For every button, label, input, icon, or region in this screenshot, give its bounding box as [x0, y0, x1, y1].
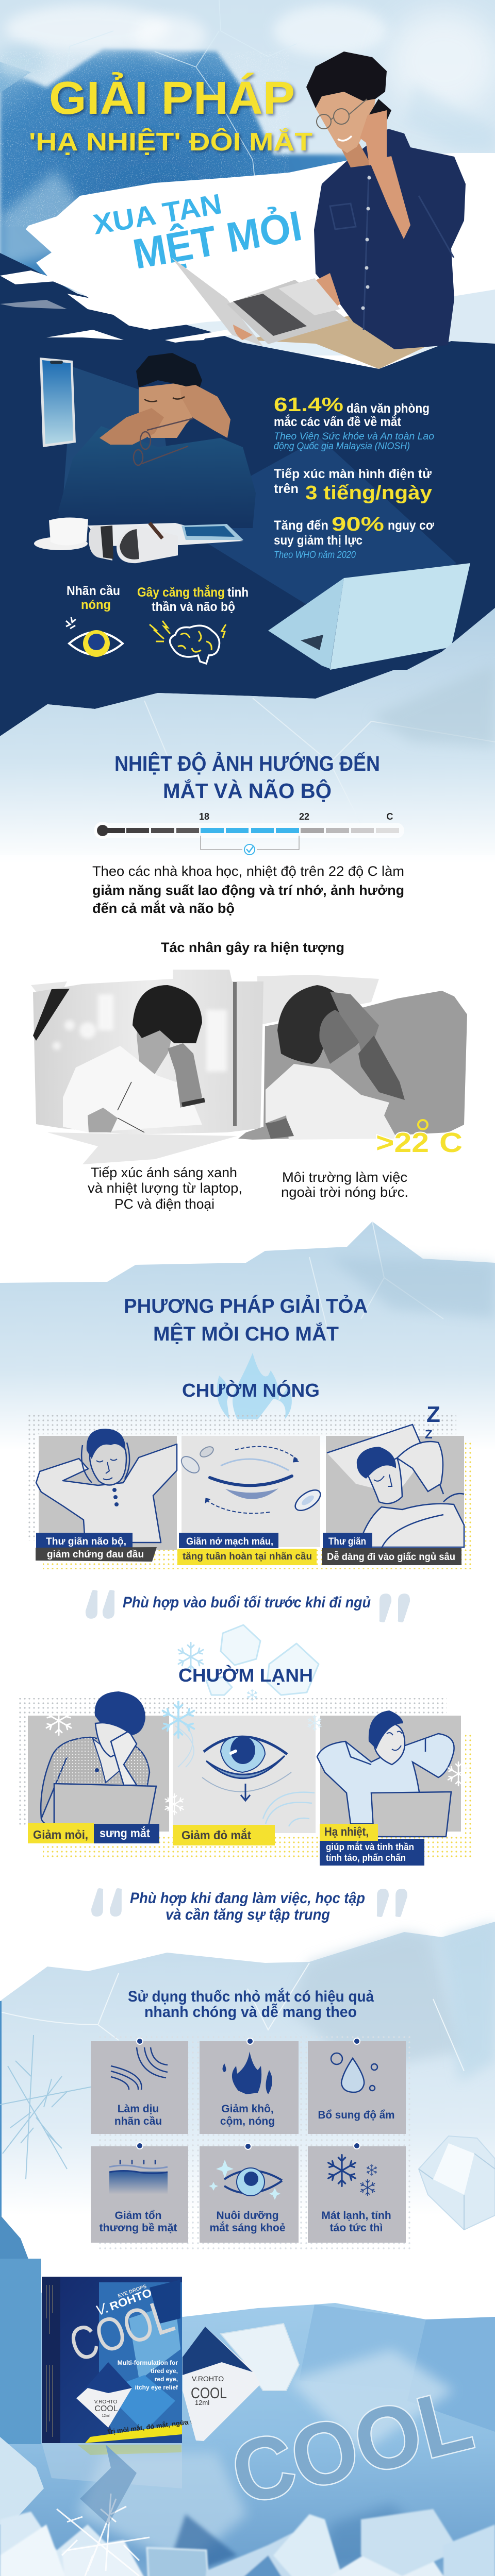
- panel: deep sleep: Z: [426, 1402, 440, 1427]
- hot eye label and icon: [66, 584, 123, 657]
- product box: Multi-formulation for: [118, 2359, 178, 2366]
- quote: cold compress: và cần tăng sự tập trung: [166, 1906, 330, 1923]
- hero ice background: [0, 0, 495, 361]
- stressed brain label and icon: [137, 584, 249, 664]
- laptop back: [268, 563, 470, 670]
- stats text: Theo Viện Sức khỏe và An toàn Lao: [274, 431, 434, 442]
- crystal snowflake on ice: [57, 2494, 150, 2576]
- card: nourish: mắt sáng khoẻ: [209, 2222, 286, 2234]
- panel: eye cooling: [173, 1716, 316, 1833]
- ice chunks: [0, 2509, 495, 2576]
- product box: Trị mỏi mắt, đỏ mắt, ngứa mắt: [107, 2416, 203, 2436]
- product box: V.: [93, 2299, 111, 2319]
- laptop light beam: [170, 438, 456, 629]
- white brush banner: [26, 153, 495, 335]
- product box: COOL: [63, 2290, 180, 2372]
- stats text: Theo WHO năm 2020: [274, 550, 356, 561]
- card: cool: táo tức thì: [330, 2222, 383, 2234]
- labels: eye cooling: Giảm đỏ mắt: [182, 1828, 251, 1842]
- card: soothe: Làm dịu: [118, 2103, 159, 2115]
- caption: hot outdoors: ngoài trời nóng bức.: [281, 1184, 408, 1200]
- caption: blue light: [88, 1165, 242, 1212]
- stats text: 90%: [332, 514, 384, 535]
- icon: ice cube: [419, 2136, 495, 2230]
- subtitle: [91, 188, 305, 278]
- thermometer: 18: [199, 811, 209, 822]
- temperature paragraph: Theo các nhà khoa học, nhiệt độ trên 22 độ C làm: [92, 863, 404, 879]
- heading: hot compress: CHƯỜM NÓNG: [182, 1379, 320, 1401]
- icon: crystal snowflake: [0, 2035, 93, 2179]
- stats text: Tăng đến: [274, 518, 328, 533]
- stats text: nguy cơ: [388, 518, 434, 533]
- thermometer: C: [387, 811, 393, 822]
- labels: relax brain: giảm chứng đau đầu: [47, 1549, 144, 1560]
- panel: deep sleep: Z: [425, 1428, 433, 1442]
- labels: tired worker: sưng mắt: [100, 1826, 150, 1840]
- temperature badge: >22: [376, 1127, 429, 1158]
- card: dryness: Giảm khô,: [221, 2103, 274, 2115]
- decor: ice cubes and snowflakes: [178, 1625, 319, 1701]
- stats text: Tiếp xúc màn hình điện tử: [274, 467, 432, 481]
- temperature badge: [376, 1120, 463, 1158]
- caption: blue light: PC và điện thoại: [114, 1196, 214, 1212]
- labels: refreshed worker: [320, 1824, 424, 1866]
- subtitle: MỆT MỎI: [129, 202, 305, 278]
- quote: cold compress: [91, 1888, 407, 1923]
- title: 'HẠ NHIỆT' ĐÔI MẮT: [29, 128, 312, 156]
- labels: relax brain: [36, 1533, 157, 1562]
- bottle: V.ROHTO: [192, 2375, 224, 2383]
- stats text: suy giảm thị lực: [274, 533, 362, 548]
- temperature section ice background: [0, 608, 495, 876]
- heading: temperature: NHIỆT ĐỘ ẢNH HƯỚNG ĐẾN: [114, 752, 380, 775]
- card: moisture: [308, 2038, 406, 2134]
- methods section ice background: [0, 1222, 495, 1450]
- card: surface: thương bề mặt: [99, 2222, 177, 2234]
- product box: EYE DROPS: [117, 2283, 147, 2299]
- labels: sleep: Dễ dàng đi vào giấc ngủ sâu: [327, 1551, 455, 1563]
- card: cool: [308, 2143, 406, 2243]
- brush strokes over navy: [0, 270, 232, 343]
- bottle: COOL: [191, 2385, 227, 2402]
- navy section background: [0, 253, 495, 736]
- product box: ROHTO: [108, 2286, 154, 2313]
- product box: COOL: [94, 2404, 118, 2413]
- product box: V.ROHTO: [94, 2399, 117, 2405]
- bottle: 12ml: [195, 2399, 209, 2406]
- stressed brain label and icon: tinh: [227, 585, 249, 600]
- labels: tired worker: [28, 1823, 159, 1843]
- heading: temperature: MẮT VÀ NÃO BỘ: [163, 779, 332, 803]
- labels: refreshed worker: giúp mắt và tinh thần: [326, 1841, 414, 1852]
- icon: pale flame: [217, 1353, 292, 1419]
- quote: hot compress: [86, 1590, 410, 1622]
- eye drops section ice background: [0, 1922, 495, 2334]
- stats text: [274, 394, 434, 561]
- ice cube behind bottle: [221, 2324, 299, 2391]
- stats text: động Quốc gia Malaysia (NIOSH): [274, 441, 410, 452]
- card: nourish: [200, 2143, 299, 2243]
- card: dryness: cộm, nóng: [220, 2115, 275, 2127]
- card: surface: [91, 2143, 188, 2243]
- title: GIẢI PHÁP: [49, 72, 295, 124]
- labels: sleep: Thư giãn: [328, 1536, 366, 1547]
- panel: blood circulation: [178, 1436, 324, 1547]
- labels: tired worker: Giảm mỏi,: [33, 1828, 88, 1841]
- stats text: 3 tiếng/ngày: [305, 482, 432, 504]
- panel: tired worker: [28, 1691, 169, 1832]
- title: [29, 72, 312, 156]
- phone: [40, 358, 76, 447]
- stats text: trên: [274, 482, 299, 496]
- card: cool: Mát lạnh, tỉnh: [321, 2210, 391, 2222]
- caption: blue light: và nhiệt lượng từ laptop,: [88, 1180, 242, 1196]
- product box: tired eye,: [151, 2367, 178, 2375]
- hot eye label and icon: Nhãn cầu: [67, 584, 120, 598]
- stressed brain label and icon: thần và não bộ: [152, 600, 235, 614]
- stats text: mắc các vấn đề về mắt: [274, 414, 402, 429]
- heading: eye drops: Sử dụng thuốc nhỏ mắt có hiệu quả: [128, 1988, 374, 2005]
- card: soothe: nhãn cầu: [114, 2115, 162, 2127]
- card: surface: Giảm tổn: [114, 2210, 162, 2222]
- card: nourish: Nuôi dưỡng: [216, 2210, 279, 2222]
- temperature paragraph: [92, 863, 404, 916]
- labels: refreshed worker: Hạ nhiệt,: [324, 1825, 369, 1838]
- product box: itchy eye relief: [135, 2384, 178, 2391]
- heading: methods: PHƯƠNG PHÁP GIẢI TỎA: [124, 1295, 368, 1317]
- heading: causes: Tác nhân gây ra hiện tượng: [161, 940, 344, 955]
- card: moisture: Bổ sung độ ẩm: [318, 2109, 395, 2121]
- brush behind photos: [31, 975, 379, 1164]
- product box: [42, 2277, 203, 2443]
- heading: temperature: [114, 752, 380, 803]
- caption: hot outdoors: Môi trường làm việc: [282, 1170, 407, 1185]
- labels: circulation: tăng tuần hoàn tại nhãn cầu: [183, 1551, 312, 1562]
- desk items: cup, headphones, notebook, tablet: [34, 517, 243, 563]
- stressed brain label and icon: Gây căng thẳng: [137, 584, 225, 600]
- panel: deep sleep: [326, 1402, 464, 1548]
- heading: cold compress: CHƯỜM LẠNH: [178, 1664, 313, 1686]
- labels: circulation: [177, 1533, 317, 1565]
- product box: red eye,: [155, 2376, 178, 2383]
- stats text: 61.4%: [274, 394, 343, 416]
- caption: blue light: Tiếp xúc ánh sáng xanh: [91, 1165, 237, 1180]
- bottom ice background: [0, 2259, 495, 2576]
- tired man: [58, 353, 256, 528]
- caption: hot outdoors: [281, 1170, 408, 1200]
- card: dryness: [200, 2038, 299, 2134]
- heading: eye drops: nhanh chóng và dễ mang theo: [144, 2003, 357, 2021]
- dot pattern: benefit grid: [98, 2035, 412, 2250]
- temperature paragraph: đến cả mắt và não bộ: [92, 900, 235, 916]
- snowflakes around panels: [46, 1702, 469, 1815]
- phone light beam: [62, 367, 175, 520]
- quote: cold compress: Phù hợp khi đang làm việc, học tập: [130, 1890, 365, 1907]
- photo: man rubbing eyes at a screen: [33, 970, 263, 1134]
- temperature badge: C: [439, 1127, 463, 1158]
- heading: methods: MỆT MỎI CHO MẮT: [153, 1323, 339, 1345]
- hot eye label and icon: nóng: [81, 598, 111, 612]
- bottle: [183, 2327, 260, 2441]
- labels: circulation: Giãn nở mạch máu,: [186, 1536, 273, 1547]
- product box reflection: [42, 2443, 182, 2524]
- labels: relax brain: Thư giãn não bộ,: [46, 1536, 126, 1547]
- labels: refreshed worker: tỉnh táo, phấn chấn: [326, 1853, 406, 1863]
- photo: man wiping sweat in the heat: [238, 985, 467, 1140]
- ice lettering: COOL: [222, 2370, 481, 2523]
- temperature paragraph: giảm năng suất lao động và trí nhớ, ảnh hưởng: [92, 883, 404, 898]
- heading: methods: [124, 1295, 368, 1345]
- card: soothe: [91, 2038, 188, 2134]
- product box: 12ml: [102, 2414, 110, 2418]
- panel: refreshed worker: [317, 1710, 461, 1837]
- stats text: dân văn phòng: [346, 401, 430, 416]
- heading: eye drops: [128, 1988, 374, 2021]
- panel: relax brain: [36, 1429, 177, 1550]
- thermometer: 22: [299, 811, 309, 822]
- labels: eye cooling: [173, 1825, 275, 1845]
- thermometer: [94, 811, 404, 855]
- dot patterns: cold compress: [18, 1698, 471, 1860]
- subtitle: XUA TAN: [91, 188, 224, 241]
- labels: sleep: [322, 1533, 461, 1565]
- quote: hot compress: Phù hợp vào buổi tối trước khi đi ngủ: [123, 1594, 371, 1611]
- man with phone and laptop: [172, 52, 466, 369]
- dot patterns: hot compress: [28, 1413, 471, 1569]
